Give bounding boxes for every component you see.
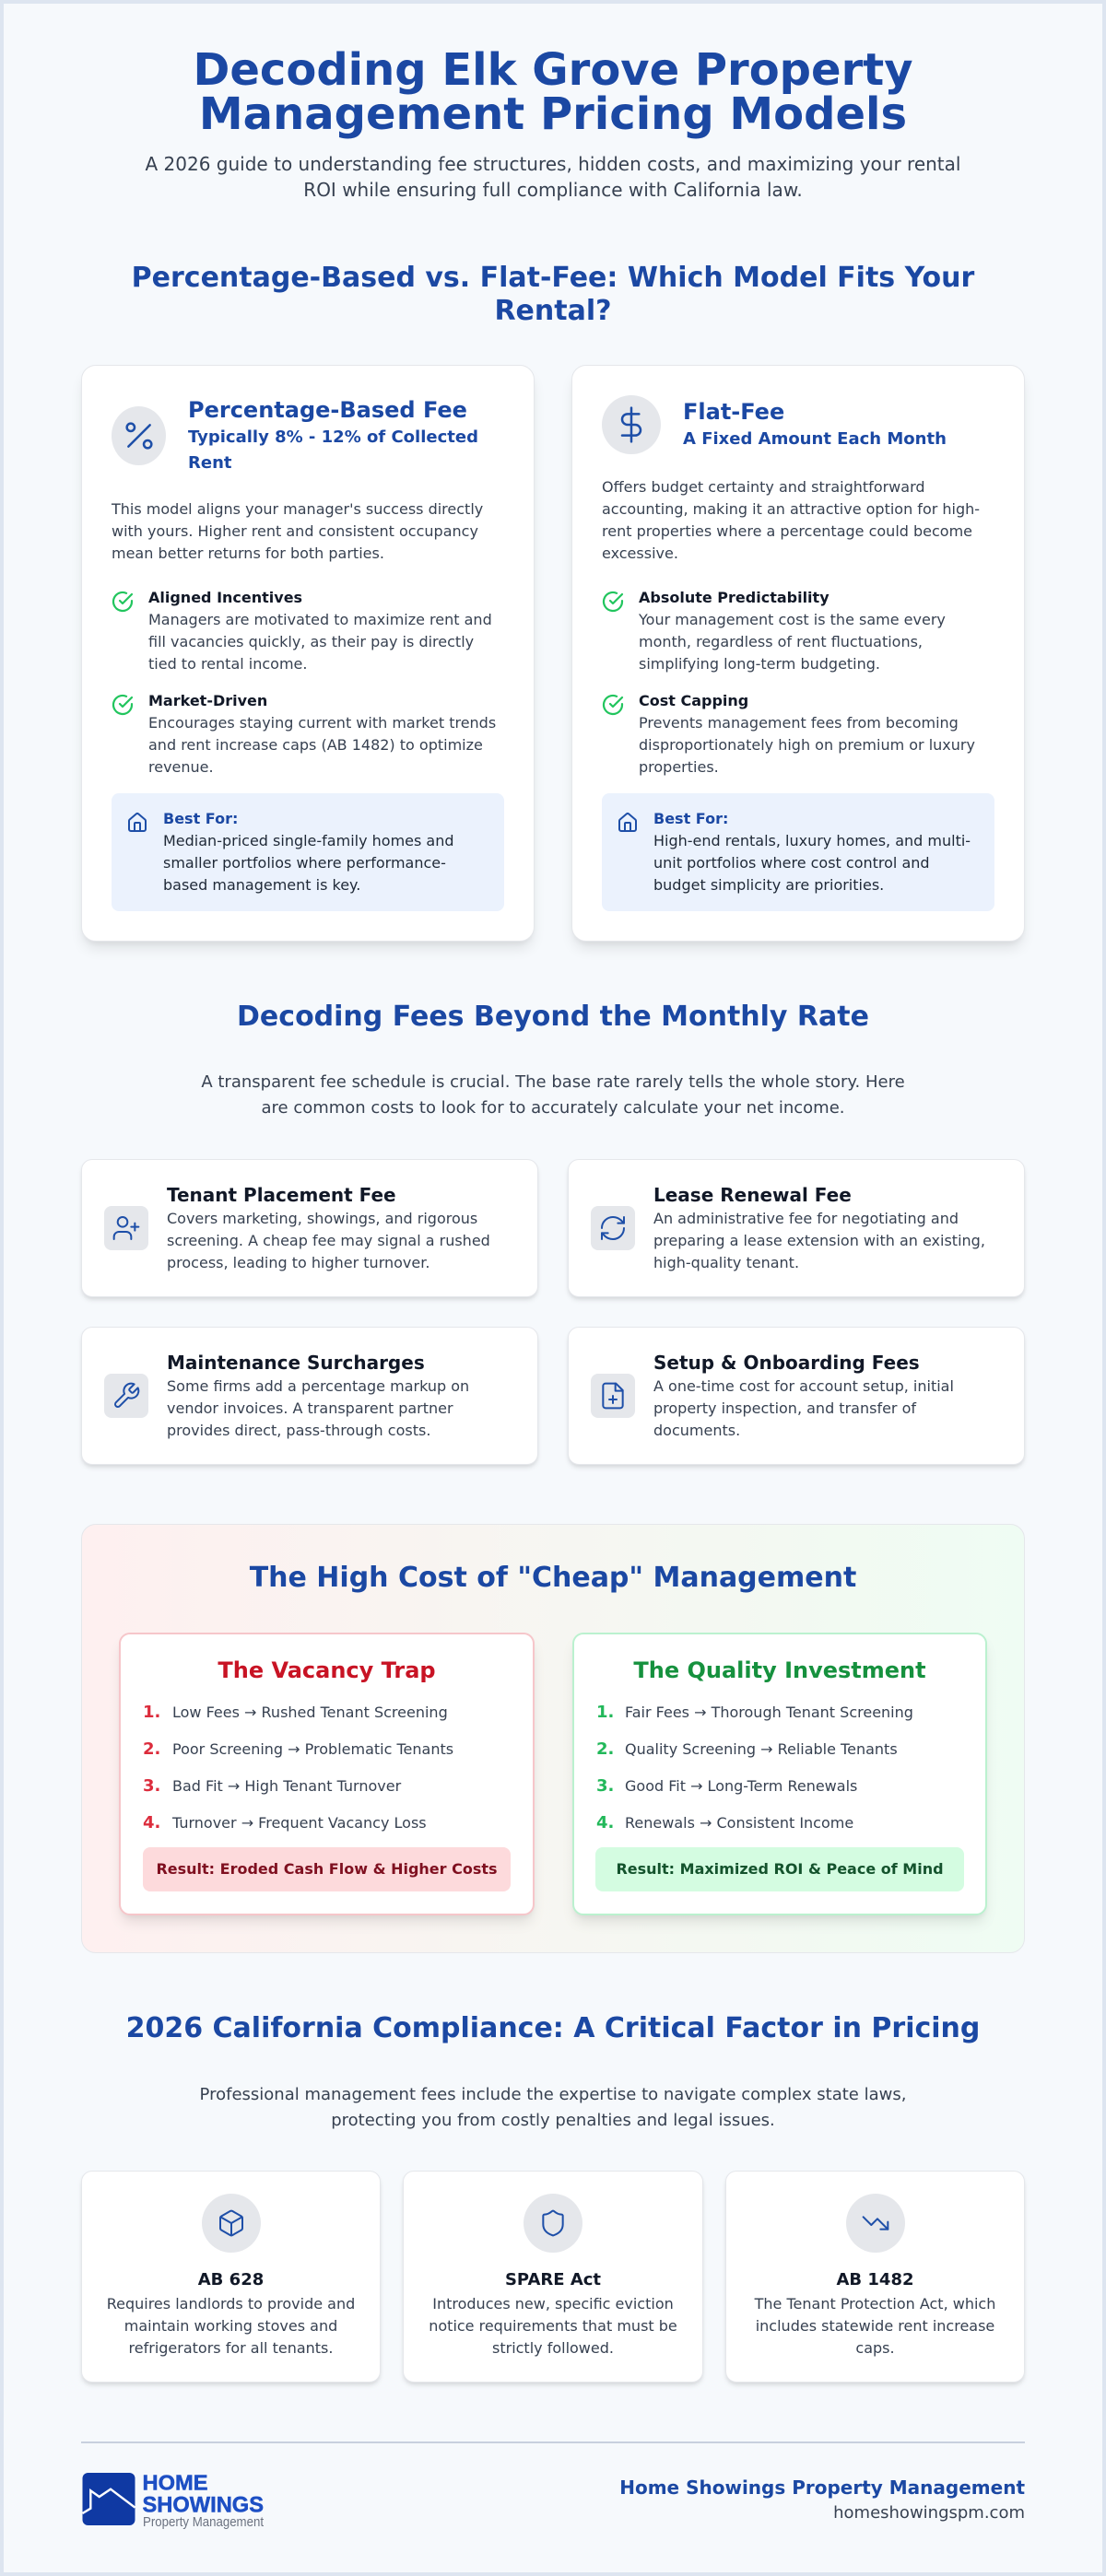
fee text: Some firms add a percentage markup on [167,1377,469,1395]
logo [83,2471,264,2530]
heading: pricing models [132,262,975,327]
compliance intro: Professional management fees include the expertise to navigate complex state laws, [200,2085,906,2104]
fee text: An administrative fee for negotiating and [653,1210,959,1227]
panel: quality investment [572,1633,987,1915]
quality steps [596,1703,913,1832]
icon: shield [524,2194,582,2253]
fee text: A one-time cost for account setup, initial [653,1377,954,1395]
quality steps: Fair Fees → Thorough Tenant Screening [625,1704,913,1721]
benefit: aligned incentives: tied to rental income. [148,655,307,673]
best for text: unit portfolios where cost control and [653,854,930,872]
footer website: homeshowingspm.com [833,2503,1025,2523]
law text: Requires landlords to provide and [107,2295,355,2313]
fee text [653,1352,954,1439]
icon: check [603,695,623,715]
benefit: absolute predictability: month, regardless of rent fluctuations, [639,633,923,650]
fee text: provides direct, pass-through costs. [167,1422,430,1439]
quality steps: 3. [596,1776,614,1796]
logo text: Property Management [143,2515,264,2530]
trap steps: Poor Screening → Problematic Tenants [172,1740,453,1758]
heading: pricing models: Rental? [494,295,612,327]
best for text [163,810,454,894]
icon: check [112,695,133,715]
fee text: preparing a lease extension with an existing, [653,1232,985,1249]
panel: AB 628 [81,2171,381,2383]
benefit: cost capping [639,692,975,776]
description: accounting, making it an attractive option for high- [602,500,980,518]
panel: tenant placement fee [81,1159,538,1297]
quality steps: Good Fit → Long-Term Renewals [625,1777,857,1795]
card subtitle: Typically 8% - 12% of Collected [188,427,478,447]
fee text: Tenant Placement Fee [167,1184,396,1206]
quality title: The Quality Investment [633,1657,926,1683]
best for text: Best For: [653,810,728,827]
quality steps: Renewals → Consistent Income [625,1814,853,1832]
law text: AB 628 [198,2270,264,2289]
description: excessive. [602,544,678,562]
benefit: aligned incentives: Aligned Incentives [148,589,302,606]
logo text [142,2471,264,2530]
quality steps: 4. [596,1813,614,1832]
card title: Percentage-Based Fee [188,397,467,423]
benefit: cost capping: Cost Capping [639,692,748,709]
benefit: cost capping: Prevents management fees from becoming [639,714,959,732]
law text [754,2270,995,2357]
best for text: smaller portfolios where performance- [163,854,446,872]
fee text: high-quality tenant. [653,1254,799,1271]
fees intro [201,1072,905,1118]
card subtitle: A Fixed Amount Each Month [683,429,947,449]
best for text: budget simplicity are priorities. [653,876,884,894]
law text [107,2270,355,2357]
subtitle: A 2026 guide to understanding fee structures, hidden costs, and maximizing your rental [146,153,960,175]
trap steps: 1. [143,1703,160,1722]
callout: best for [602,793,994,911]
description [111,500,483,562]
law text: maintain working stoves and [124,2317,337,2335]
description: rent properties where a percentage could become [602,522,972,540]
icon: home [618,813,637,832]
panel: high cost of cheap management [81,1524,1025,1953]
title: Management Pricing Models [199,88,907,140]
heading: compliance: 2026 California Compliance: A Critical Factor in Pricing [126,2012,980,2044]
quality result: Result: Maximized ROI & Peace of Mind [616,1860,944,1878]
fee text: process, leading to higher turnover. [167,1254,429,1271]
benefit: absolute predictability: simplifying long-term budgeting. [639,655,880,673]
icon: user plus [104,1206,148,1250]
best for text: based management is key. [163,876,360,894]
trap steps: Low Fees → Rushed Tenant Screening [172,1704,448,1721]
trap steps: 4. [143,1813,160,1832]
quality result [595,1847,964,1891]
trap steps: Bad Fit → High Tenant Turnover [172,1777,401,1795]
law text [429,2270,677,2357]
description: Offers budget certainty and straightforward [602,478,925,496]
law text: Introduces new, specific eviction [432,2295,674,2313]
icon: trending down [846,2194,905,2253]
description: with yours. Higher rent and consistent occupancy [112,522,478,540]
benefit: aligned incentives [148,589,492,673]
best for text [653,810,971,894]
compliance intro [200,2085,906,2130]
law text: notice requirements that must be [429,2317,677,2335]
logo text: HOME [142,2471,208,2495]
compliance intro: protecting you from costly penalties and legal issues. [331,2111,775,2130]
quality steps: Quality Screening → Reliable Tenants [625,1740,898,1758]
card subtitle [188,427,478,473]
trap steps: Turnover → Frequent Vacancy Loss [172,1814,427,1832]
panel: vacancy trap [119,1633,535,1915]
icon: refresh [591,1206,635,1250]
heading: fees: Decoding Fees Beyond the Monthly Rate [237,1001,869,1033]
description: mean better returns for both parties. [112,544,384,562]
fee text [167,1352,469,1439]
law text: AB 1482 [836,2270,914,2289]
icon: file plus [591,1374,635,1418]
fee text: vendor invoices. A transparent partner [167,1399,453,1417]
benefit: cost capping: properties. [639,758,719,776]
trap result [143,1847,511,1891]
law text: refrigerators for all tenants. [129,2339,333,2357]
law text: strictly followed. [492,2339,614,2357]
trap result: Result: Eroded Cash Flow & Higher Costs [156,1860,498,1878]
fee text: property inspection, and transfer of [653,1399,916,1417]
law text: includes statewide rent increase [756,2317,994,2335]
icon: wrench [104,1374,148,1418]
logo mark [83,2473,135,2525]
icon: home [128,813,147,832]
title [193,44,912,140]
benefit: absolute predictability: Absolute Predictability [639,589,830,606]
heading: pricing models: Percentage-Based vs. Flat-Fee: Which Model Fits Your [132,262,974,294]
trap steps: 3. [143,1776,160,1796]
subtitle [146,153,960,201]
benefit: market-driven: revenue. [148,758,214,776]
quality steps: 1. [596,1703,614,1722]
icon: check [603,591,623,612]
law text: caps. [855,2339,895,2357]
best for text: Best For: [163,810,238,827]
logo text: SHOWINGS [142,2493,264,2517]
icon: dollar [602,395,661,454]
trap steps: 2. [143,1739,160,1759]
callout: best for [112,793,504,911]
fee text: Lease Renewal Fee [653,1184,852,1206]
title: Decoding Elk Grove Property [193,44,912,96]
fee text: documents. [653,1422,740,1439]
law text: SPARE Act [505,2270,601,2289]
panel: percentage-based fee [81,365,535,942]
icon: percent [112,406,166,465]
benefit: market-driven: and rent increase caps (AB 1482) to optimize [148,736,483,754]
benefit: market-driven: Encourages staying current with market trends [148,714,496,732]
best for text: High-end rentals, luxury homes, and multi- [653,832,971,849]
benefit: aligned incentives: Managers are motivated to maximize rent and [148,611,492,628]
panel: maintenance surcharges [81,1327,538,1465]
benefit: absolute predictability [639,589,946,673]
law text: The Tenant Protection Act, which [755,2295,995,2313]
heading: The High Cost of "Cheap" Management [250,1562,856,1594]
subtitle: ROI while ensuring full compliance with California law. [303,179,803,201]
card title: Flat-Fee [683,399,784,425]
panel: flat-fee [571,365,1025,942]
fee text: Covers marketing, showings, and rigorous [167,1210,477,1227]
fee text: Maintenance Surcharges [167,1352,425,1374]
panel: SPARE Act [403,2171,703,2383]
benefit: market-driven [148,692,496,776]
icon: check [112,591,133,612]
trap title: The Vacancy Trap [218,1657,436,1683]
best for text: Median-priced single-family homes and [163,832,454,849]
footer company name: Home Showings Property Management [619,2476,1025,2499]
panel: AB 1482 [725,2171,1025,2383]
benefit: cost capping: disproportionately high on premium or luxury [639,736,975,754]
trap steps [143,1703,453,1832]
fee text: Setup & Onboarding Fees [653,1352,920,1374]
description: This model aligns your manager's success directly [112,500,483,518]
description [602,478,980,562]
quality steps: 2. [596,1739,614,1759]
panel: setup and onboarding fees [568,1327,1025,1465]
fee text [167,1184,490,1271]
fee text: screening. A cheap fee may signal a rushed [167,1232,490,1249]
benefit: market-driven: Market-Driven [148,692,267,709]
fees intro: A transparent fee schedule is crucial. The base rate rarely tells the whole story. Here [201,1072,905,1092]
benefit: aligned incentives: fill vacancies quickly, as their pay is directly [148,633,474,650]
card subtitle: Rent [188,453,232,473]
benefit: absolute predictability: Your management cost is the same every [639,611,946,628]
fee text [653,1184,985,1271]
icon: box [202,2194,261,2253]
fees intro: are common costs to look for to accurately calculate your net income. [261,1098,844,1118]
panel: lease renewal fee [568,1159,1025,1297]
